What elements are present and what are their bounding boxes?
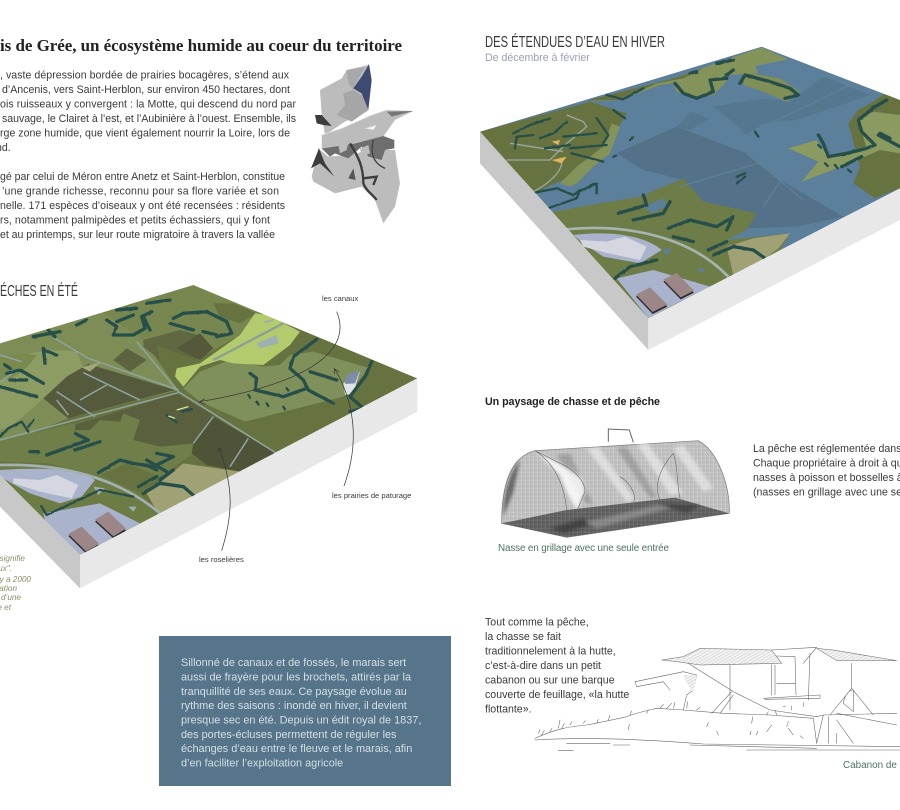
blue info box: Sillonné de canaux et de fossés, le marais sert: [181, 657, 406, 669]
hunting paragraph: traditionnelement à la hutte,: [485, 646, 616, 658]
hunting paragraph: la chasse se fait: [485, 631, 561, 643]
caption: fish trap: Nasse en grillage avec une seule entrée: [498, 543, 670, 554]
label: les canaux: les canaux: [322, 294, 359, 303]
intro text block: ois ruisseaux y convergent : la Motte, qui descend du nord par: [0, 98, 296, 110]
tracks and hamlets: [507, 115, 597, 192]
side note: [0, 554, 31, 612]
section subheading: De décembre à février: [485, 52, 590, 64]
blue info box: échanges d’eau entre le fleuve et le marais, afin: [181, 743, 412, 755]
callouts: [199, 312, 353, 551]
hedges: [0, 300, 372, 515]
section heading: summer: ÉCHES EN ÉTÉ: [0, 281, 78, 300]
road and buildings: [653, 313, 658, 316]
blue info box: des portes-écluses permettent de réguler les: [181, 729, 397, 741]
hedges: [513, 60, 900, 278]
intro text block: et au printemps, sur leur route migratoire à travers la vallée: [0, 229, 275, 241]
intro text block: nelle. 171 espèces d’oiseaux y ont été recensées : résidents: [0, 200, 285, 212]
blue info box: d’en faciliter l’exploitation agricole: [181, 758, 343, 770]
intro text block: , vaste dépression bordée de prairies bocagères, s’étend aux: [0, 70, 290, 82]
intro text block: gé par celui de Méron entre Anetz et Saint-Herblon, constitue: [0, 171, 285, 183]
intro text block: ’une grande richesse, reconnu pour sa flore variée et son: [2, 186, 279, 198]
land S: [550, 178, 790, 318]
illustration: hunting hut: [535, 647, 900, 751]
fishing paragraph: [753, 443, 900, 498]
hunting paragraph: [485, 616, 629, 716]
warehouse: [13, 475, 78, 498]
side note: y a 2000: [0, 575, 31, 584]
heading: chasse et pêche: Un paysage de chasse et de pêche: [485, 396, 660, 408]
side note: d’une: [1, 593, 21, 602]
locator map: [311, 64, 413, 223]
intro text block: rs, notamment palmipèdes et petits échassiers, qui y font: [0, 214, 270, 226]
illustration: fish trap: [502, 429, 729, 537]
intro text block: sauvage, le Clairet à l’est, et l’Aubinière à l’ouest. Ensemble, ils: [2, 113, 296, 125]
label: les roselières: les roselières: [199, 555, 244, 564]
fishing paragraph: (nasses en grillage avec une se: [753, 486, 900, 498]
blue info box: rythme des saisons : inondé en hiver, il devient: [181, 700, 407, 712]
fishing paragraph: Chaque propriétaire à droit à qu: [753, 458, 900, 470]
intro text block: [0, 70, 296, 241]
winter block diagram: [480, 47, 900, 350]
hunting paragraph: couverte de feuillage, «la hutte: [485, 689, 629, 701]
intro text block: d’Ancenis, vers Saint-Herblon, sur environ 450 hectares, dont: [2, 84, 290, 96]
blue info box: tranquillité de ses eaux. Ce paysage évolue au: [181, 686, 407, 698]
intro text block: rge zone humide, que vient également nourrir la Loire, lors de: [0, 128, 290, 140]
blue info box: [159, 636, 451, 786]
land N: [590, 47, 788, 102]
canals: [0, 337, 277, 467]
land NW: [480, 102, 627, 193]
section heading: winter: DES ÉTENDUES D’EAU EN HIVER: [485, 32, 665, 51]
side note: signifie: [0, 554, 25, 563]
label: les prairies de paturage: les prairies de paturage: [332, 491, 411, 500]
fishing paragraph: nasses à poisson et bosselles à: [753, 472, 900, 484]
blue info box: presque sec en été. Depuis un édit royal de 1837,: [181, 714, 421, 726]
hunting paragraph: c’est-à-dire dans un petit: [485, 660, 601, 672]
fishing paragraph: La pêche est réglementée dans: [753, 443, 900, 455]
title: is de Grée, un écosystème humide au coeur du territoire: [0, 36, 402, 55]
hunting paragraph: cabanon ou sur une barque: [485, 674, 615, 686]
hunting paragraph: flottante».: [485, 704, 532, 716]
hunting paragraph: Tout comme la pêche,: [485, 616, 589, 628]
land E: [848, 93, 900, 198]
summer block diagram: [0, 285, 417, 588]
blue info box: aussi de frayère pour les brochets, attirés par la: [181, 672, 412, 684]
barns: [68, 535, 99, 552]
